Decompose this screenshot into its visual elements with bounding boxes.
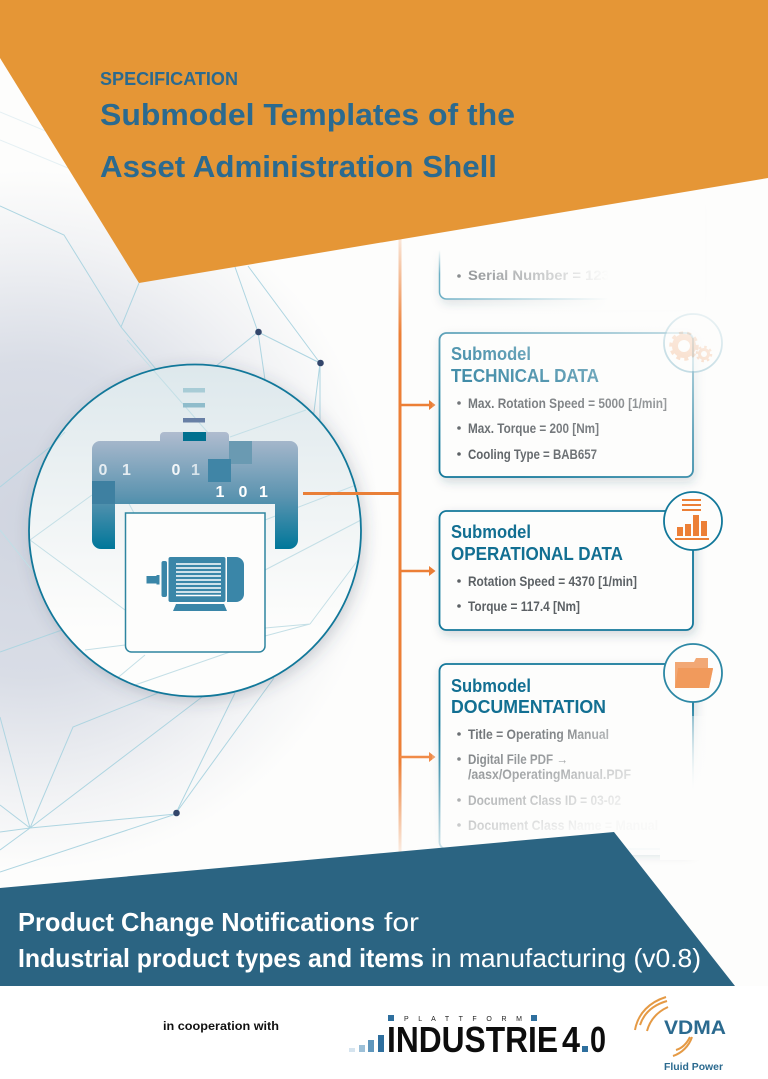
arrow to documentation [400, 752, 436, 762]
logo: Plattform Industrie 4.0: 0 [590, 1019, 606, 1060]
technical data list [457, 395, 667, 462]
binary digits [98, 462, 268, 501]
network lines inside circle [0, 340, 361, 685]
icon: folder [664, 644, 722, 702]
documentation list: /aasx/OperatingManual.PDF [468, 766, 631, 782]
vertical orange connector line [398, 235, 402, 855]
subtitle block: for [384, 907, 419, 937]
binary digits: 1 [216, 484, 224, 501]
operational data heading [451, 522, 623, 564]
documentation list: Title = Operating Manual [468, 726, 609, 742]
operational data list: Rotation Speed = 4370 [1/min] [468, 573, 637, 589]
technical data heading: TECHNICAL DATA [451, 366, 599, 386]
connector from circle to vertical line [303, 492, 400, 495]
technical data list: Max. Torque = 200 [Nm] [468, 420, 599, 436]
grey background glow [0, 170, 380, 870]
title block [100, 69, 515, 184]
binary digits: 1 [122, 462, 131, 479]
technical data heading [451, 344, 599, 386]
icon: gears [664, 314, 722, 372]
logo: VDMA Fluid Power: Fluid Power [664, 1062, 723, 1073]
footer white strip [0, 986, 768, 1079]
logo: VDMA Fluid Power [635, 997, 726, 1073]
title block: Asset Administration Shell [100, 149, 497, 184]
binary digits: 0 [238, 484, 248, 501]
binary digits: 1 [259, 484, 268, 501]
asset box [126, 513, 265, 652]
documentation list: Digital File PDF → [468, 751, 568, 767]
documentation list [457, 726, 658, 833]
operational data list [457, 573, 637, 614]
cooperation text: in cooperation with [163, 1019, 279, 1033]
logo: VDMA Fluid Power: VDMA [664, 1018, 726, 1039]
icon: bar chart [664, 492, 722, 550]
binary digits: 0 [98, 462, 108, 479]
panel: documentation [432, 644, 740, 860]
logo: Plattform Industrie 4.0: INDUSTRIE [387, 1019, 558, 1060]
panel: magnifier circle [0, 340, 361, 696]
banner: blue footer [0, 832, 735, 986]
panel: faded top card [430, 190, 705, 310]
technical data list: Max. Rotation Speed = 5000 [1/min] [468, 395, 667, 411]
subtitle block [18, 907, 701, 973]
documentation list: Document Class ID = 03-02 [468, 792, 621, 808]
subtitle block: Product Change Notifications [18, 907, 375, 937]
banner: orange header [0, 0, 768, 283]
subtitle block: in manufacturing (v0.8) [431, 943, 701, 973]
logo: Plattform Industrie 4.0: P L A T T F O R M [404, 1016, 522, 1023]
documentation heading: Submodel [451, 676, 531, 696]
logo: Plattform Industrie 4.0: 4 [562, 1019, 580, 1060]
title block: SPECIFICATION [100, 69, 238, 89]
operational data list: Torque = 117.4 [Nm] [468, 598, 580, 614]
documentation list: Document Class Name = Manual [468, 817, 658, 833]
arrow to technical data [400, 400, 436, 410]
operational data heading: Submodel [451, 522, 531, 542]
asset administration shell shape [92, 388, 298, 549]
logo: Plattform Industrie 4.0 [349, 1015, 606, 1060]
panel: technical data [432, 310, 727, 482]
operational data heading: OPERATIONAL DATA [451, 544, 623, 564]
faded item text: Serial Number = 1234 [468, 267, 618, 283]
arrow to operational data [400, 566, 436, 576]
binary digits: 1 [191, 462, 200, 479]
documentation heading: DOCUMENTATION [451, 697, 606, 717]
technical data list: Cooling Type = BAB657 [468, 446, 597, 462]
technical data heading: Submodel [451, 344, 531, 364]
binary digits: 0 [172, 462, 180, 479]
network lines background [0, 112, 361, 872]
network nodes [173, 329, 324, 816]
subtitle block: Industrial product types and items [18, 943, 424, 973]
icon: electric motor [146, 557, 244, 611]
documentation heading [451, 676, 606, 717]
title block: Submodel Templates of the [100, 97, 515, 132]
panel: operational data [440, 492, 722, 630]
